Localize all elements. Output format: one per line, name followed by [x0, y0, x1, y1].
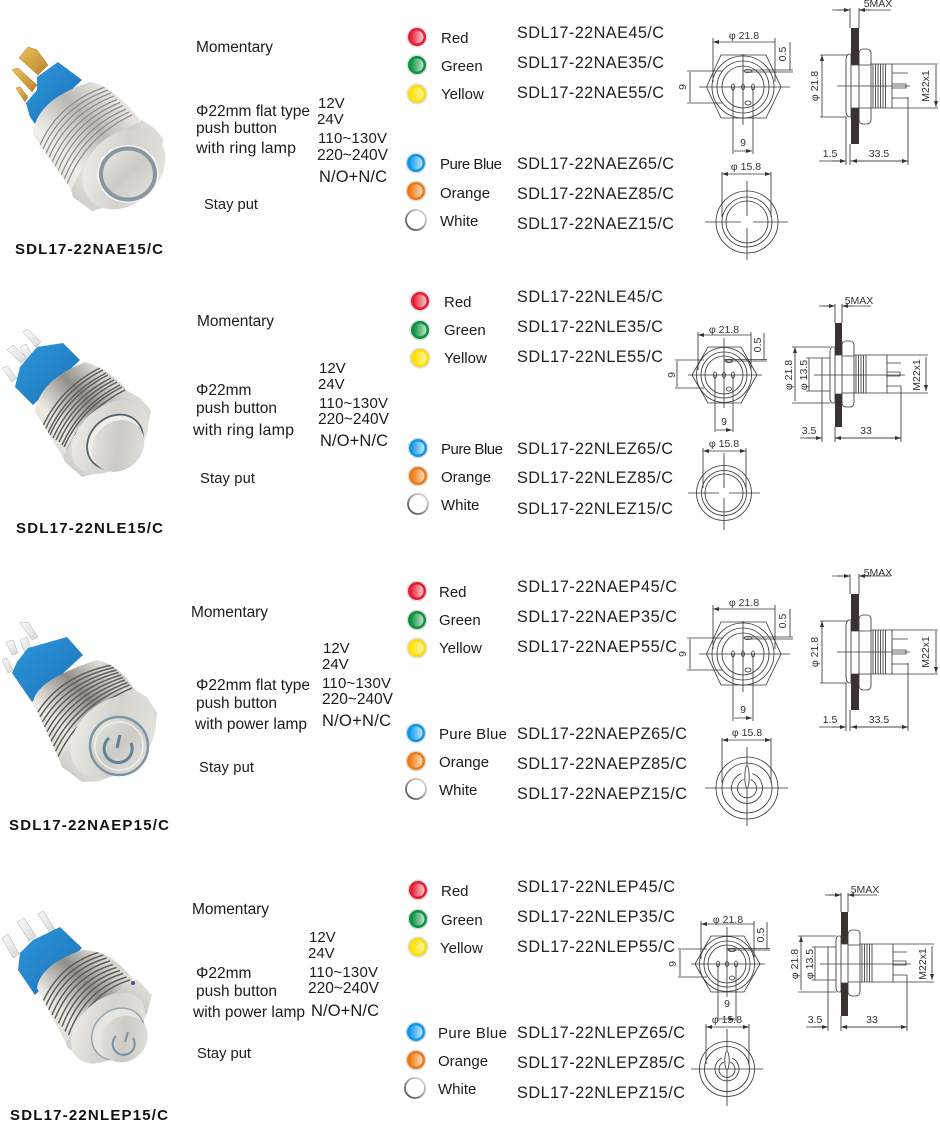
colour legend: Yellow — [440, 940, 483, 957]
colour legend: Yellow — [444, 350, 487, 367]
description text: Stay put — [199, 760, 254, 776]
model codes: SDL17-22NAEPZ65/C — [517, 725, 687, 743]
voltage and contact options: 12V — [323, 640, 350, 657]
voltage and contact options: 24V — [318, 376, 345, 393]
voltage and contact options: 12V — [309, 929, 336, 946]
colour legend: White — [441, 497, 479, 514]
rear view drawing: φ 21.8 — [709, 324, 739, 336]
model codes: SDL17-22NLE45/C — [517, 288, 663, 306]
description text: push button — [196, 695, 277, 712]
front view drawing: φ 15.8 — [731, 161, 761, 173]
side view drawing: 33 — [860, 425, 872, 437]
model codes: SDL17-22NLE35/C — [517, 318, 663, 336]
colour legend: White — [439, 782, 477, 799]
colour legend: Pure Blue — [441, 441, 503, 458]
colour legend: Orange — [441, 469, 491, 486]
model codes: SDL17-22NAEZ65/C — [517, 155, 674, 173]
description text: with power lamp — [192, 1004, 305, 1021]
model codes: SDL17-22NLEP45/C — [517, 878, 675, 896]
colour legend — [406, 580, 507, 799]
model codes: SDL17-22NAEZ85/C — [517, 185, 674, 203]
rear view drawing — [666, 324, 767, 432]
description text: Stay put — [204, 197, 258, 213]
description text: Stay put — [197, 1046, 251, 1062]
voltage and contact options: N/O+N/C — [320, 432, 388, 450]
voltage and contact options: 12V — [318, 95, 345, 112]
model codes — [517, 578, 687, 803]
side view drawing: 33.5 — [869, 148, 889, 160]
front view drawing — [705, 161, 788, 260]
rear view drawing: φ 21.8 — [713, 914, 743, 926]
power symbol on button — [104, 738, 132, 763]
description text: Φ22mm — [196, 965, 251, 982]
side view drawing: M22x1 — [920, 70, 932, 102]
rear view drawing: 9 — [740, 704, 746, 716]
voltage and contact options: 220~240V — [322, 691, 394, 708]
rear view drawing: 9 — [677, 84, 689, 90]
product code label: SDL17-22NAEP15/C — [9, 817, 169, 834]
model codes — [517, 24, 674, 233]
voltage and contact options — [308, 929, 380, 1020]
product photo: raised ring lamp button — [2, 328, 151, 477]
voltage and contact options: 220~240V — [317, 147, 389, 164]
description text: Φ22mm flat type — [196, 103, 310, 120]
side view drawing — [789, 884, 934, 1031]
side view drawing: 5MAX — [864, 567, 892, 579]
model codes: SDL17-22NLEZ65/C — [517, 440, 673, 458]
description text — [192, 313, 294, 487]
rear view drawing: 9 — [667, 961, 679, 967]
colour legend: Green — [441, 912, 483, 929]
description text — [192, 901, 305, 1062]
model codes: SDL17-22NAEP45/C — [517, 578, 677, 596]
panel: SDL17-22NLE15/C — [2, 288, 928, 537]
side view drawing: M22x1 — [920, 636, 932, 668]
model codes: SDL17-22NLEP35/C — [517, 908, 675, 926]
voltage and contact options: 24V — [322, 656, 349, 673]
colour legend: Yellow — [441, 86, 484, 103]
product photo: flat power lamp button — [2, 622, 157, 782]
side view drawing: φ 21.8 — [789, 949, 801, 979]
colour legend: Green — [439, 612, 481, 629]
colour legend: Orange — [439, 754, 489, 771]
model codes: SDL17-22NAEP55/C — [517, 638, 677, 656]
front view drawing with power symbol — [691, 1014, 763, 1106]
description text: Stay put — [200, 471, 255, 487]
rear view drawing: 0.5 — [752, 338, 764, 352]
side view drawing: 1.5 — [823, 714, 837, 726]
colour legend: Pure Blue — [438, 1025, 507, 1042]
front view drawing with power symbol: φ 15.8 — [732, 727, 762, 739]
side view drawing — [809, 0, 938, 165]
rear view drawing: 9 — [666, 372, 678, 378]
model codes — [517, 288, 673, 518]
rear view drawing: 0.5 — [755, 928, 767, 942]
side view drawing: φ 21.8 — [783, 360, 795, 390]
description text: Momentary — [192, 901, 269, 918]
model codes: SDL17-22NAE55/C — [517, 84, 664, 102]
side view drawing: 33.5 — [869, 714, 889, 726]
model codes: SDL17-22NAE45/C — [517, 24, 664, 42]
voltage and contact options: N/O+N/C — [322, 712, 391, 730]
colour legend: Pure Blue — [440, 156, 502, 173]
model codes: SDL17-22NLEPZ65/C — [517, 1024, 685, 1042]
model codes: SDL17-22NLEP55/C — [517, 938, 675, 956]
rear view drawing — [667, 914, 770, 1021]
description text: push button — [196, 120, 277, 137]
model codes: SDL17-22NAEP35/C — [517, 608, 677, 626]
colour legend: Red — [441, 883, 469, 900]
panel: SDL17-22NAEP15/C — [2, 567, 938, 834]
description text: Momentary — [191, 604, 268, 621]
rear view drawing: 9 — [740, 137, 746, 149]
description text: Momentary — [196, 39, 273, 56]
colour legend: Orange — [438, 1053, 488, 1070]
model codes: SDL17-22NLEZ15/C — [517, 500, 673, 518]
rear view drawing: 0.5 — [777, 614, 789, 628]
side view drawing — [809, 567, 938, 731]
side view drawing: φ 21.8 — [809, 71, 821, 101]
side view drawing: 5MAX — [851, 884, 879, 896]
rear view drawing: 9 — [721, 416, 727, 428]
rear view drawing — [677, 597, 793, 721]
front view drawing: φ 15.8 — [709, 438, 739, 450]
description text — [195, 39, 310, 213]
voltage and contact options: 110~130V — [319, 395, 388, 412]
description text — [191, 604, 310, 776]
colour legend: Pure Blue — [439, 726, 507, 743]
description text: Φ22mm — [196, 382, 251, 399]
side view drawing: M22x1 — [911, 359, 923, 391]
side view drawing: 3.5 — [808, 1014, 822, 1026]
colour legend: Green — [441, 58, 483, 75]
voltage and contact options: 220~240V — [308, 980, 380, 997]
model codes: SDL17-22NLEPZ15/C — [517, 1084, 685, 1102]
rear view drawing — [677, 30, 793, 154]
colour legend — [408, 290, 503, 514]
front view drawing with power symbol: φ 15.8 — [712, 1014, 742, 1026]
voltage and contact options — [317, 95, 389, 186]
model codes — [517, 878, 685, 1102]
colour legend: White — [438, 1081, 476, 1098]
side view drawing: φ 13.5 — [798, 360, 810, 390]
rear view drawing: 9 — [677, 651, 689, 657]
product photo: flat ring lamp button — [12, 46, 166, 211]
description text: with ring lamp — [192, 422, 294, 439]
colour legend: Red — [441, 30, 469, 47]
side view drawing — [783, 295, 928, 442]
front view drawing with power symbol — [705, 727, 788, 826]
voltage and contact options — [322, 640, 394, 730]
colour legend: Green — [444, 322, 486, 339]
front view drawing — [688, 438, 760, 530]
colour legend: Red — [444, 294, 472, 311]
model codes: SDL17-22NLEPZ85/C — [517, 1054, 685, 1072]
product photo: raised power lamp button — [2, 910, 152, 1064]
side view drawing: 3.5 — [802, 425, 816, 437]
voltage and contact options: N/O+N/C — [319, 168, 387, 186]
colour legend: Yellow — [439, 640, 482, 657]
colour legend: Red — [439, 584, 467, 601]
side view drawing: 33 — [866, 1014, 878, 1026]
side view drawing: φ 21.8 — [809, 637, 821, 667]
rear view drawing: 0.5 — [777, 47, 789, 61]
colour legend: White — [440, 213, 478, 230]
voltage and contact options: 110~130V — [318, 130, 387, 147]
model codes: SDL17-22NLE55/C — [517, 348, 663, 366]
voltage and contact options: 110~130V — [322, 675, 391, 692]
rear view drawing: φ 21.8 — [729, 30, 759, 42]
product code label: SDL17-22NAE15/C — [15, 241, 163, 258]
model codes: SDL17-22NLEZ85/C — [517, 469, 673, 487]
rear view drawing: 9 — [724, 998, 730, 1010]
description text: Φ22mm flat type — [196, 677, 310, 694]
model codes: SDL17-22NAEPZ85/C — [517, 755, 687, 773]
voltage and contact options: 110~130V — [309, 964, 378, 981]
voltage and contact options: 24V — [308, 945, 335, 962]
voltage and contact options: 24V — [317, 111, 344, 128]
voltage and contact options: 12V — [319, 360, 346, 377]
voltage and contact options: N/O+N/C — [311, 1002, 379, 1020]
description text: push button — [196, 400, 277, 417]
rear view drawing: φ 21.8 — [729, 597, 759, 609]
colour legend — [406, 26, 502, 230]
panel: SDL17-22NLEP15/C — [2, 878, 934, 1121]
model codes: SDL17-22NAEZ15/C — [517, 215, 674, 233]
product code label: SDL17-22NLE15/C — [16, 520, 163, 537]
voltage and contact options: 220~240V — [318, 411, 390, 428]
model codes: SDL17-22NAEPZ15/C — [517, 785, 687, 803]
colour legend — [405, 880, 507, 1098]
power symbol on button — [113, 1036, 135, 1055]
side view drawing: M22x1 — [917, 948, 929, 980]
voltage and contact options — [318, 360, 390, 450]
side view drawing: 1.5 — [823, 148, 837, 160]
colour legend: Orange — [440, 185, 490, 202]
description text: with power lamp — [194, 716, 307, 733]
panel: SDL17-22NAE15/C — [12, 0, 938, 260]
description text: Momentary — [197, 313, 274, 330]
description text: push button — [196, 983, 277, 1000]
description text: with ring lamp — [195, 140, 296, 157]
model codes: SDL17-22NAE35/C — [517, 54, 664, 72]
side view drawing: 5MAX — [845, 295, 873, 307]
side view drawing: φ 13.5 — [804, 949, 816, 979]
